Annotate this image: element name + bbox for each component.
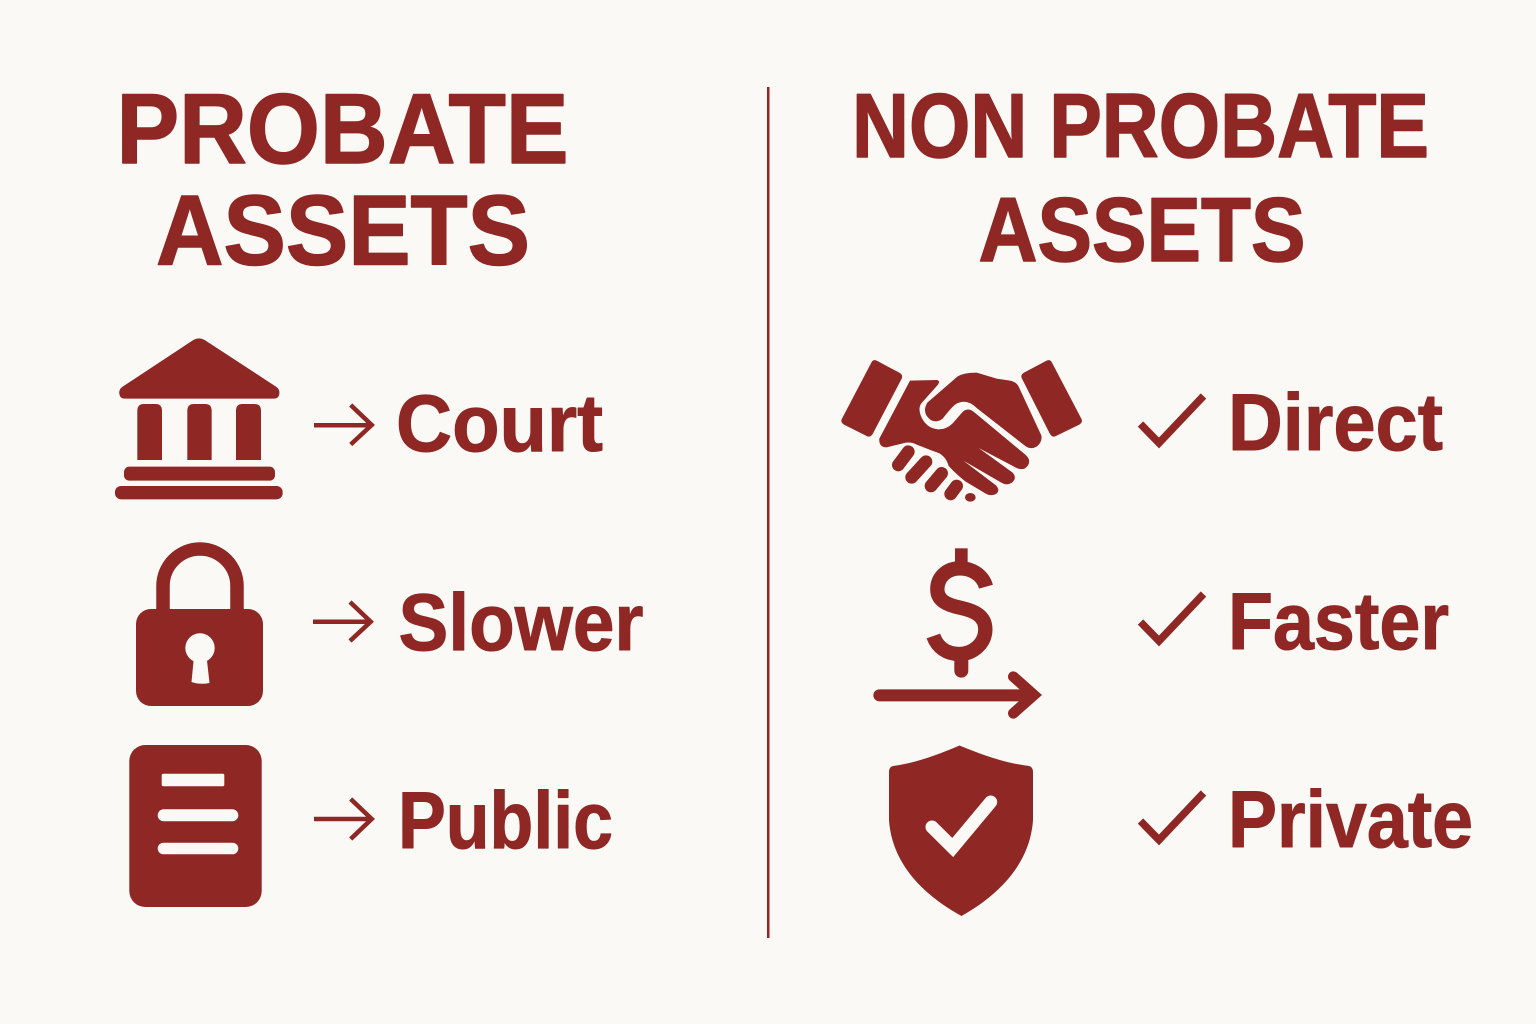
icon: shield bbox=[889, 746, 1033, 916]
arrow: slower bbox=[313, 602, 371, 641]
icon: padlock bbox=[136, 549, 263, 706]
heading: non probate assets: ASSETS bbox=[978, 180, 1306, 281]
check: private bbox=[1140, 793, 1204, 840]
check: direct bbox=[1140, 396, 1204, 443]
arrow: public bbox=[314, 799, 372, 839]
heading: non probate assets bbox=[852, 76, 1429, 281]
label: faster: Faster bbox=[1228, 577, 1449, 667]
icon: courthouse bbox=[115, 338, 283, 499]
heading: probate assets bbox=[116, 73, 568, 286]
heading: probate assets: ASSETS bbox=[156, 174, 530, 286]
panel: non probate assets bbox=[841, 76, 1473, 916]
arrow: court bbox=[314, 405, 372, 444]
panel: probate assets bbox=[115, 73, 644, 907]
heading: non probate assets: NON PROBATE bbox=[852, 76, 1429, 177]
label: private: Private bbox=[1228, 775, 1473, 865]
check: faster bbox=[1140, 594, 1204, 641]
label: public: Public bbox=[398, 776, 613, 866]
label: direct: Direct bbox=[1228, 378, 1443, 468]
icon: dollar transfer bbox=[879, 548, 1034, 713]
label: court: Court bbox=[396, 379, 603, 469]
label: slower: Slower bbox=[398, 578, 644, 668]
heading: probate assets: PROBATE bbox=[116, 73, 568, 184]
icon: document bbox=[129, 745, 262, 907]
icon: handshake bbox=[841, 360, 1082, 502]
